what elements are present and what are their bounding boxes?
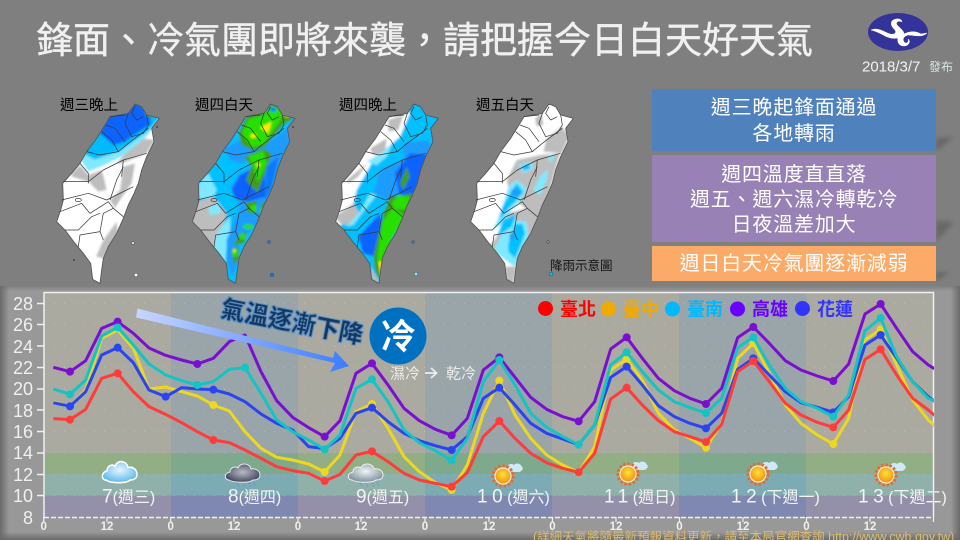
day labels: 13(下週二) bbox=[858, 486, 947, 508]
day labels: 10(週六) bbox=[477, 486, 550, 508]
rainfall map: Thursday daytime: 週四白天 bbox=[195, 97, 253, 114]
rainfall map: Friday daytime: 週五白天 bbox=[476, 97, 534, 114]
legend: 臺中 bbox=[623, 300, 659, 320]
label: wet cold to dry cold: 乾冷 bbox=[446, 366, 476, 382]
legend: 高雄 bbox=[752, 298, 788, 320]
y axis labels: 20 bbox=[13, 379, 33, 399]
icon: cold badge bbox=[370, 308, 426, 364]
label: wet cold to dry cold bbox=[390, 366, 476, 382]
rainfall map: Wednesday night: 週三晚上 bbox=[60, 97, 118, 114]
y axis labels: 22 bbox=[13, 358, 33, 378]
day labels: 11(週日) bbox=[604, 486, 675, 508]
arrow: temperature falling bbox=[136, 308, 349, 372]
heading: temperature falling: 氣溫逐漸下降 bbox=[219, 296, 365, 349]
line: Taipei bbox=[53, 345, 935, 491]
x axis labels: 0 bbox=[295, 521, 301, 533]
publish date: 2018/3/7 bbox=[862, 58, 920, 76]
x axis labels: 0 bbox=[549, 521, 556, 533]
rainfall map: Wednesday night bbox=[56, 97, 160, 284]
x axis labels: 0 bbox=[676, 521, 683, 533]
panel: temperature summary: 日夜溫差加大 bbox=[732, 213, 856, 236]
publish date: 發布 bbox=[929, 59, 953, 74]
chart background bands bbox=[44, 293, 934, 517]
panel: temperature summary: 週四溫度直直落 bbox=[721, 163, 867, 186]
line: Hualien bbox=[53, 331, 935, 454]
x axis labels: 12 bbox=[355, 521, 367, 533]
legend bbox=[538, 298, 853, 320]
day labels: 7(週三) bbox=[102, 486, 155, 508]
x axis labels: 12 bbox=[864, 521, 876, 533]
day labels: 9(週五) bbox=[356, 486, 409, 508]
y axis labels: 28 bbox=[13, 294, 33, 314]
x axis labels: 0 bbox=[422, 521, 428, 533]
day labels bbox=[102, 486, 947, 508]
y axis labels: 8 bbox=[23, 508, 33, 528]
label: wet cold to dry cold: 濕冷 bbox=[390, 366, 420, 382]
x axis labels: 12 bbox=[483, 521, 495, 533]
x axis labels: 12 bbox=[228, 521, 240, 533]
legend: 臺北 bbox=[560, 300, 596, 320]
axes bbox=[37, 292, 934, 522]
y axis labels: 16 bbox=[13, 422, 33, 442]
chart: temperature forecast bbox=[13, 292, 935, 533]
rainfall map: Thursday night: 週四晚上 bbox=[339, 97, 397, 114]
line: Tainan bbox=[53, 314, 935, 464]
y axis labels: 12 bbox=[13, 465, 33, 485]
rainfall map caption: 降雨示意圖 bbox=[550, 258, 613, 273]
icon: grey rain cloud bbox=[348, 464, 383, 487]
y axis labels bbox=[13, 294, 33, 528]
panel: weekend summary bbox=[652, 246, 936, 281]
legend: 臺南 bbox=[687, 300, 723, 320]
icon: dark rain cloud bbox=[225, 464, 260, 487]
x axis labels: 12 bbox=[737, 521, 749, 533]
x axis labels: 0 bbox=[40, 521, 47, 533]
rainfall map: Thursday night bbox=[335, 97, 439, 284]
y axis labels: 10 bbox=[13, 486, 33, 506]
y axis labels: 18 bbox=[13, 401, 33, 421]
line: Taichung bbox=[53, 325, 935, 494]
x axis labels: 0 bbox=[167, 521, 174, 533]
day labels: 12(下週一) bbox=[731, 486, 820, 508]
x axis labels bbox=[40, 521, 876, 533]
x axis labels: 12 bbox=[610, 521, 622, 533]
day labels: 8(週四) bbox=[228, 486, 281, 508]
y axis labels: 26 bbox=[13, 315, 33, 335]
panel: rain summary bbox=[652, 89, 936, 151]
rainfall map: Thursday daytime bbox=[192, 97, 296, 284]
panel: rain summary: 各地轉雨 bbox=[752, 122, 836, 145]
rainfall map: Friday daytime bbox=[470, 97, 574, 284]
line: Kaohsiung bbox=[53, 300, 935, 441]
y axis labels: 24 bbox=[13, 337, 33, 357]
icon: sun 10th bbox=[493, 464, 523, 486]
publish date bbox=[862, 58, 953, 76]
panel: rain summary: 週三晚起鋒面通過 bbox=[711, 96, 877, 119]
panel: chart frame bbox=[0, 286, 960, 540]
panel: temperature summary bbox=[652, 155, 936, 242]
icon: sun 12th bbox=[748, 462, 778, 484]
logo bbox=[868, 13, 928, 51]
icon: cold badge: 冷 bbox=[380, 318, 416, 357]
x axis labels: 0 bbox=[803, 521, 810, 533]
title: 鋒面、冷氣團即將來襲，請把握今日白天好天氣 bbox=[36, 20, 813, 61]
icon: sun 11th bbox=[618, 462, 648, 484]
icon: cloudy bbox=[102, 462, 137, 483]
panel: temperature summary: 週五、週六濕冷轉乾冷 bbox=[690, 188, 898, 211]
legend: 花蓮 bbox=[817, 300, 853, 320]
x axis labels: 12 bbox=[101, 521, 113, 533]
icon: sun 13th bbox=[876, 463, 906, 485]
panel: weekend summary: 週日白天冷氣團逐漸減弱 bbox=[680, 252, 908, 275]
y axis labels: 14 bbox=[13, 443, 33, 463]
